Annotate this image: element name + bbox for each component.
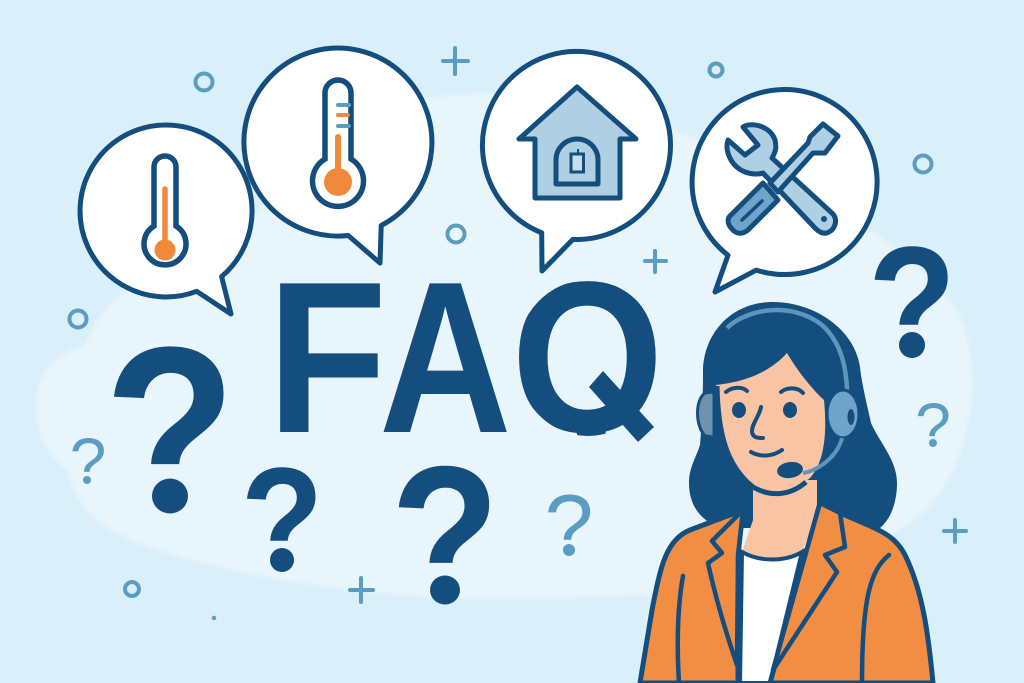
lapels [708,510,743,665]
icon: wrench [727,125,836,233]
speech bubble: house [482,51,670,271]
headset [698,310,859,480]
eyebrows, nose, mouth [726,388,803,456]
sleeve creases [678,555,889,683]
hair [689,302,897,528]
light question marks: ? [545,476,593,575]
jacket [640,503,933,683]
light question marks [70,390,951,575]
heading: FAQ [280,281,656,442]
shirt [740,552,802,683]
light question marks: ? [70,424,106,498]
speech bubble: tools [692,90,877,292]
dark question marks: ? [391,424,499,646]
decorative plus signs [350,48,966,602]
heading: FAQ: Q [511,236,664,478]
icon: house [519,87,636,198]
face [716,353,825,492]
heading: FAQ: A [379,238,512,478]
icon: screwdriver [728,124,838,233]
speech bubble: thermometer low [80,125,252,314]
dark question marks: ? [868,214,956,393]
speech bubble: thermometer high [244,48,432,263]
neck [742,480,817,560]
decorative circles [70,64,932,619]
dark question marks: ? [241,437,323,605]
icon: thermometer high [313,80,364,206]
icon: thermometer low [144,156,186,265]
person: support agent [640,302,933,683]
light question marks: ? [915,390,951,462]
dark question marks [104,214,956,646]
heading: FAQ: F [267,236,387,478]
dark question marks: ? [104,297,236,566]
eyes [732,402,746,418]
